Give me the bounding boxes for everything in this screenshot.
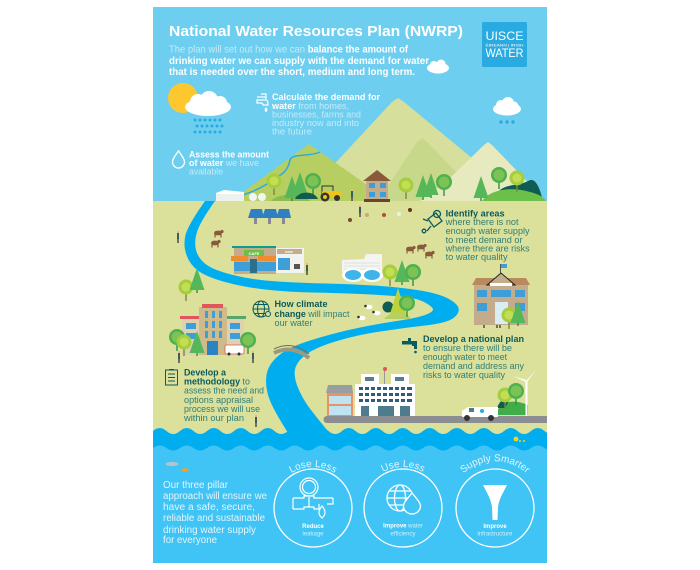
icon: globe with thermometer xyxy=(253,301,270,317)
van xyxy=(462,407,498,421)
water lower xyxy=(153,446,558,563)
text: identify areas: to meet demand or xyxy=(446,235,523,246)
text: develop a methodology: process we will use xyxy=(184,404,260,415)
label: reduce leakage: Reduce xyxy=(302,524,324,530)
label: improve water efficiency: Improve water xyxy=(383,524,423,530)
text: calculate the demand: water from homes, xyxy=(271,101,349,112)
office building xyxy=(355,367,415,416)
logo: Uisce Eireann Irish Water: ÉIREANN | IRISH xyxy=(486,42,524,48)
icon: clipboard xyxy=(166,370,178,385)
text: identify areas xyxy=(445,208,530,263)
text: identify areas: to water quality xyxy=(446,252,508,263)
label: reduce leakage xyxy=(302,524,324,538)
text: develop a methodology: options appraisal xyxy=(184,395,253,406)
pillar heading: supply smarter: Supply Smarter xyxy=(460,454,530,472)
mountain stream xyxy=(243,152,320,195)
text: how climate change: change will impact xyxy=(274,309,350,320)
text: three pillar approach: Our three pillar xyxy=(163,480,229,491)
text: develop a national plan: Develop a national plan xyxy=(423,334,524,345)
road xyxy=(324,416,547,423)
text: identify areas: where there is not xyxy=(445,217,519,228)
shop xyxy=(276,248,304,273)
logo: Uisce Eireann Irish Water xyxy=(482,22,527,67)
text: identify areas: where there are risks xyxy=(445,244,530,254)
farm animals and people xyxy=(177,205,501,427)
icon: leaking pipe gauge xyxy=(293,478,333,518)
bridge xyxy=(274,345,309,358)
text: identify areas: Identify areas xyxy=(446,208,505,220)
text: three pillar approach xyxy=(163,480,267,546)
text: three pillar approach: for everyone xyxy=(163,535,217,546)
label: improve infrastructure: infrastructure xyxy=(477,532,513,538)
text: how climate change: our water xyxy=(274,318,312,329)
text: how climate change xyxy=(274,299,350,329)
text: assess the amount: of water we have xyxy=(189,158,259,169)
text: develop a national plan: risks to water quality xyxy=(423,370,505,381)
ground xyxy=(153,201,547,436)
cafe xyxy=(231,246,277,274)
hospital xyxy=(169,304,256,356)
label: improve water efficiency xyxy=(383,524,423,538)
icon: right cloud with rain xyxy=(493,97,521,124)
poster background xyxy=(153,7,558,563)
pillar heading: lose less: Lose Less xyxy=(288,460,336,473)
label: improve water efficiency: efficiency xyxy=(391,532,415,538)
orange building xyxy=(326,385,353,416)
school xyxy=(472,264,530,329)
icon: water drop xyxy=(172,151,184,168)
text: develop a methodology: methodology to xyxy=(184,377,250,388)
text: calculate the demand: industry now and into xyxy=(272,118,359,129)
pillar: lose less xyxy=(273,460,353,548)
pillar heading: use less: Use Less xyxy=(380,460,424,472)
river xyxy=(184,201,459,436)
icon: funnel xyxy=(483,485,507,520)
ducks and fish xyxy=(166,437,525,472)
text: three pillar approach: approach will ensure we xyxy=(163,491,267,502)
intro text: The plan will set out how we can balance the amount of xyxy=(169,45,409,56)
text: calculate the demand xyxy=(271,92,380,138)
text: develop a methodology: assess the need and xyxy=(184,386,264,396)
intro text xyxy=(169,45,429,78)
pillar: use less xyxy=(363,460,443,548)
tractor xyxy=(295,186,353,202)
hills and trees on horizon xyxy=(266,167,546,201)
text: develop a national plan: demand and address any xyxy=(423,361,524,372)
farmhouse xyxy=(363,170,391,202)
water treatment plant xyxy=(342,254,383,282)
reservoir tanks xyxy=(216,190,266,201)
icon: watering can xyxy=(422,210,442,233)
logo: Uisce Eireann Irish Water: WATER xyxy=(486,46,524,60)
text: three pillar approach: drinking water supply xyxy=(163,525,256,536)
label: improve infrastructure xyxy=(477,524,513,538)
pillar: supply smarter xyxy=(455,454,535,548)
label: improve infrastructure: Improve xyxy=(483,524,507,530)
intro text: that is needed over the short, medium and long term. xyxy=(169,67,415,78)
text: develop a national plan: to ensure there will be xyxy=(423,343,512,354)
text: assess the amount xyxy=(189,150,270,178)
text: calculate the demand: the future xyxy=(272,126,312,138)
text: develop a national plan xyxy=(423,334,524,381)
solar panels xyxy=(248,209,291,224)
water waves upper xyxy=(153,428,547,450)
icon: sun and rain cloud xyxy=(168,83,231,134)
text: develop a national plan: enough water to meet xyxy=(423,352,507,363)
text: calculate the demand: Calculate the demand for xyxy=(272,92,380,103)
text: three pillar approach: have a safe, secure, xyxy=(163,502,255,513)
cafe: CAFE xyxy=(249,251,260,256)
text: identify areas: enough water supply xyxy=(446,226,530,237)
trees group mid xyxy=(178,260,421,319)
icon: tap xyxy=(257,94,268,112)
text: develop a methodology: within our plan xyxy=(183,413,244,424)
intro text: drinking water we can supply with the demand for water xyxy=(169,56,429,67)
title: National Water Resources Plan (NWRP) xyxy=(169,23,463,40)
shop: SHOP xyxy=(285,250,293,254)
text: develop a methodology: Develop a xyxy=(184,368,227,379)
icon: globe and drop xyxy=(387,485,420,514)
icon: dark tap xyxy=(402,338,417,353)
mountains xyxy=(232,98,547,202)
text: how climate change: How climate xyxy=(274,299,328,310)
text: assess the amount: Assess the amount xyxy=(189,150,270,161)
text: calculate the demand: businesses, farms and xyxy=(272,110,361,120)
small cloud near intro xyxy=(427,60,449,74)
label: reduce leakage: leakage xyxy=(302,532,324,538)
text: develop a methodology xyxy=(183,368,264,424)
text: assess the amount: available xyxy=(189,166,223,178)
text: three pillar approach: reliable and sustainable xyxy=(163,513,265,524)
hill and wind turbine xyxy=(495,370,536,416)
logo: Uisce Eireann Irish Water: UISCE xyxy=(486,29,524,43)
